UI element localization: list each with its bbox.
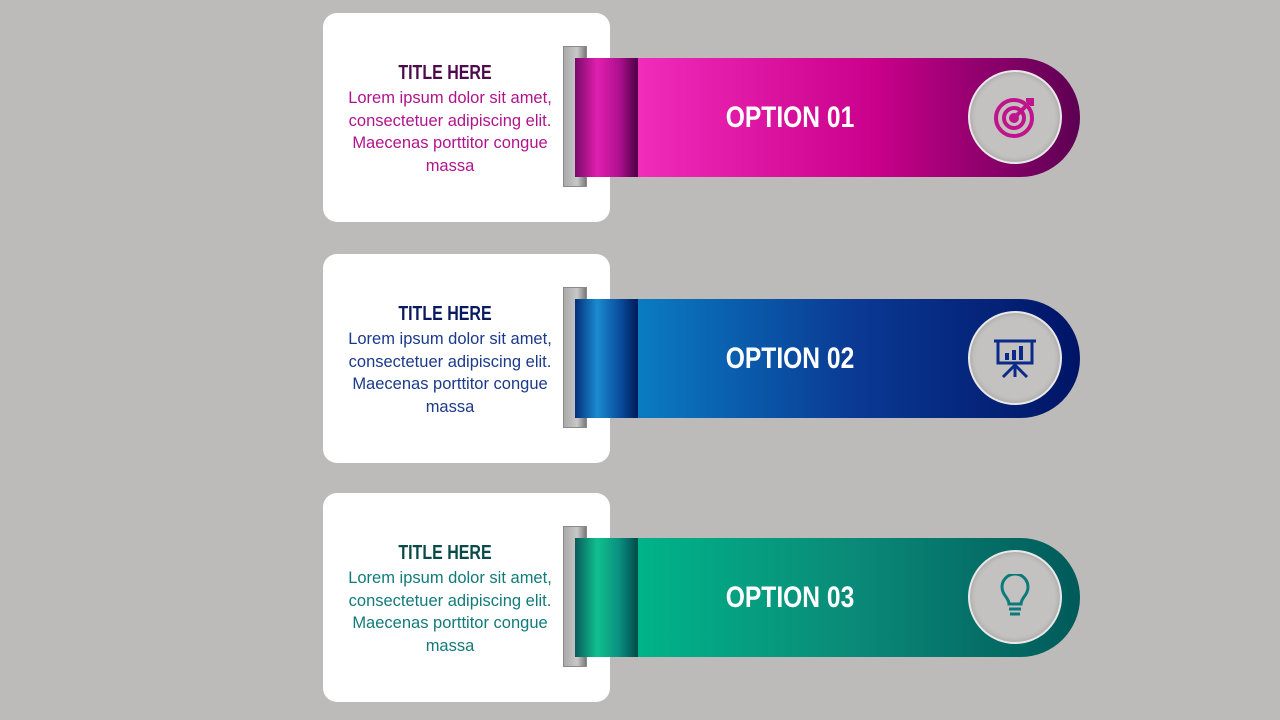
text 1: Lorem ipsum dolor sit amet, consectetuer adipiscing elit. Maecenas porttitor congue massa xyxy=(348,89,552,175)
text 3: Lorem ipsum dolor sit amet, consectetuer adipiscing elit. Maecenas porttitor congue massa xyxy=(348,569,552,655)
card 3 xyxy=(323,493,610,702)
card 2 xyxy=(323,254,610,463)
bracket 3 xyxy=(563,526,587,667)
bracket 2 xyxy=(563,287,587,428)
band 3 xyxy=(575,538,1080,657)
icon: target xyxy=(968,70,1062,164)
title 3: TITLE HERE xyxy=(398,542,492,564)
icon: presentation xyxy=(968,311,1062,405)
band 2 xyxy=(575,299,1080,418)
label 3: OPTION 03 xyxy=(726,581,854,614)
text 2: Lorem ipsum dolor sit amet, consectetuer adipiscing elit. Maecenas porttitor congue massa xyxy=(348,330,552,416)
title 2: TITLE HERE xyxy=(398,303,492,325)
band 1 xyxy=(575,58,1080,177)
card 1 xyxy=(323,13,610,222)
icon: lightbulb xyxy=(968,550,1062,644)
bracket 1 xyxy=(563,46,587,187)
label 1: OPTION 01 xyxy=(726,101,854,134)
title 1: TITLE HERE xyxy=(398,62,492,84)
label 2: OPTION 02 xyxy=(726,342,854,375)
